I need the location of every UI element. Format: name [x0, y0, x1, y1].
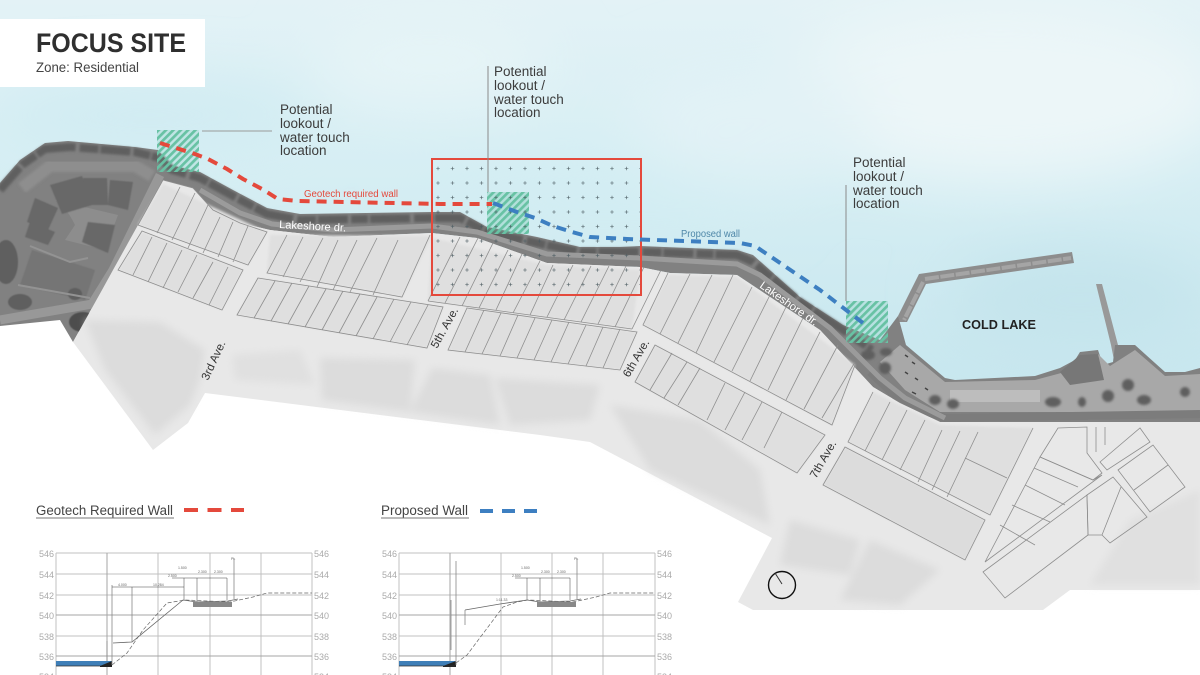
road label: Lakeshore west: Lakeshore dr. [279, 219, 346, 235]
callout: centre lookout: Potential [494, 64, 547, 79]
road label: 5th Ave: 5th. Ave. [429, 306, 461, 350]
label: proposed wall: Proposed wall [681, 229, 740, 240]
cross-section chart: proposed wall: 538 [657, 632, 672, 642]
road label: 7th Ave: 7th Ave. [808, 439, 839, 480]
cross-section chart: geotech required wall: 546 [314, 549, 329, 559]
cross-section chart: geotech required wall: 544 [39, 570, 54, 580]
water background [0, 0, 1200, 400]
north compass [768, 572, 796, 598]
cross-section chart: proposed wall: 542 [657, 591, 672, 601]
callout: east lookout: Potential [853, 155, 906, 170]
cross-section chart: proposed wall: 2.300 [557, 570, 566, 574]
cross-section chart: geotech required wall: PL [231, 557, 235, 561]
cross-section chart: proposed wall: PL [574, 557, 578, 561]
cross-section chart: geotech required wall: 540 [39, 611, 54, 621]
cross-section chart: geotech required wall: 546 [39, 549, 54, 559]
callout: west lookout: Potential [280, 102, 333, 117]
grey lot fills [118, 184, 1033, 560]
cross-section chart: proposed wall [382, 549, 672, 675]
leader line: centre callout [487, 66, 489, 192]
tree canopy along shore [0, 147, 872, 350]
cross-section chart: proposed wall: 1.500 [521, 566, 530, 570]
road label: 6th Ave: 6th Ave. [621, 338, 652, 380]
cross-section chart: geotech required wall: 542 [39, 591, 54, 601]
title: FOCUS SITE [36, 28, 186, 58]
cross-section chart: geotech required wall: 536 [314, 652, 329, 662]
road label: 3rd Ave: 3rd Ave. [200, 339, 228, 382]
title panel [0, 19, 205, 87]
west neighbourhood detail [0, 166, 160, 332]
callout: east lookout: lookout / [853, 169, 904, 184]
cross-section chart: geotech required wall [39, 549, 329, 675]
water touch zone hatch: centre [487, 192, 529, 234]
subtitle: Zone: Residential [36, 60, 139, 75]
cross-section chart: proposed wall: 540 [657, 611, 672, 621]
water touch zone hatch: west [157, 130, 199, 172]
cross-section chart: geotech required wall: 2.300 [214, 570, 223, 574]
cross-section chart: geotech required wall: 10.284 [153, 583, 164, 587]
cross-section chart: geotech required wall: 544 [314, 570, 329, 580]
leader line: west callout [202, 130, 272, 132]
callout: east lookout: water touch [852, 183, 923, 198]
callout: east lookout: location [853, 196, 900, 211]
cross-section chart: proposed wall: 546 [382, 549, 397, 559]
cross-section chart: proposed wall: 2.500 [512, 574, 521, 578]
cross-section chart: geotech required wall: 2.300 [198, 570, 207, 574]
proposed wall line [493, 203, 863, 323]
dark shoreline band and west neighbourhood [0, 141, 1200, 422]
cross-section chart: geotech required wall: 542 [314, 591, 329, 601]
pier: north breakwater [898, 252, 1074, 322]
callout: centre lookout: water touch [493, 92, 564, 107]
geotech required wall line [160, 143, 492, 204]
water touch zone hatch: east [846, 301, 888, 343]
leader line: east callout [845, 185, 847, 301]
callout: west lookout: location [280, 143, 327, 158]
legend: proposed wall: Proposed Wall [381, 503, 468, 518]
lakeshore road strip [200, 190, 945, 418]
cross-section chart: proposed wall: 536 [382, 652, 397, 662]
callout: west lookout: lookout / [280, 116, 331, 131]
cross-section chart: geotech required wall: 538 [314, 632, 329, 642]
harbour parking and paved area [861, 345, 1200, 418]
cross-section chart: proposed wall: 544 [382, 570, 397, 580]
callout: centre lookout: location [494, 105, 541, 120]
label: geotech wall: Geotech required wall [304, 189, 398, 200]
callout: west lookout: water touch [279, 130, 350, 145]
cross-section chart: proposed wall: 536 [657, 652, 672, 662]
legend: geotech required wall: Geotech Required Wall [36, 503, 173, 518]
focus area red box with plus grid [432, 159, 641, 295]
cross-section chart: proposed wall: 542 [382, 591, 397, 601]
callout: centre lookout: lookout / [494, 78, 545, 93]
pier: east jetty [1096, 284, 1118, 360]
cross-section chart: geotech required wall: 538 [39, 632, 54, 642]
cross-section chart: proposed wall: 546 [657, 549, 672, 559]
lake name: COLD LAKE [962, 318, 1036, 332]
cross-section chart: geotech required wall: 1.500 [178, 566, 187, 570]
road label: Lakeshore east: Lakeshore dr. [757, 280, 820, 328]
cross-section chart: geotech required wall: 536 [39, 652, 54, 662]
cross-section chart: proposed wall: 544 [657, 570, 672, 580]
cross-section chart: proposed wall: 2.300 [541, 570, 550, 574]
cross-section chart: geotech required wall: 4.000 [118, 583, 127, 587]
cross-section chart: proposed wall: 540 [382, 611, 397, 621]
cross-section chart: proposed wall: 1:11.33 [496, 598, 507, 602]
cross-section chart: geotech required wall: 540 [314, 611, 329, 621]
land base: light grey parcels [73, 180, 1200, 610]
lower neighbourhood building blotches [85, 320, 1200, 605]
cross-section chart: proposed wall: 538 [382, 632, 397, 642]
cross-section chart: geotech required wall: 2.500 [168, 574, 177, 578]
parcel lines [118, 180, 1185, 598]
